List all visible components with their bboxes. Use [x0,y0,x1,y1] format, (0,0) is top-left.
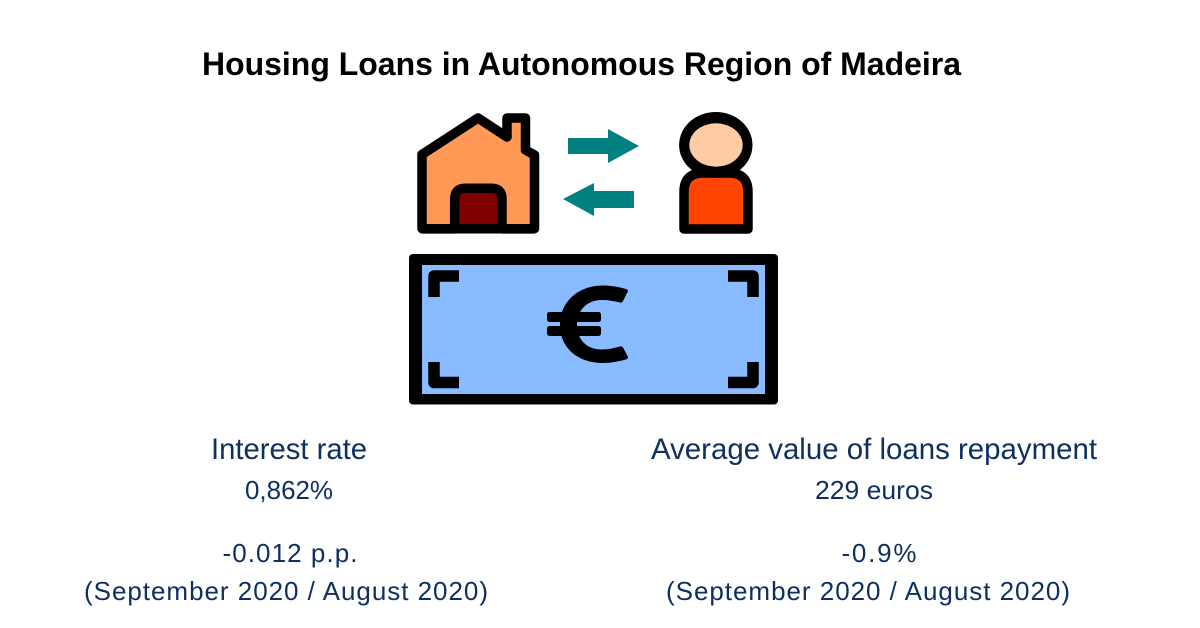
icon: person [679,112,752,229]
text block: average value of loans repayment: (September 2020 / August 2020) [666,576,1070,606]
icon: euro banknote [409,254,778,404]
title: Housing Loans in Autonomous Region of Madeira [202,46,961,82]
text block: interest rate [84,433,488,606]
text block: average value of loans repayment: 229 euros [815,475,933,505]
text block: average value of loans repayment [651,433,1097,606]
text block: interest rate: 0,862% [245,475,333,505]
text block: interest rate: Interest rate [211,433,367,466]
arrow: right, house to person [568,129,639,163]
text block: average value of loans repayment: Average value of loans repayment [651,433,1097,466]
text block: average value of loans repayment: -0.9% [842,538,916,568]
text block: interest rate: -0.012 p.p. [222,538,358,568]
arrow: left, person to house [563,183,634,216]
icon: house [420,118,535,234]
text block: interest rate: (September 2020 / August 2020) [84,576,488,606]
